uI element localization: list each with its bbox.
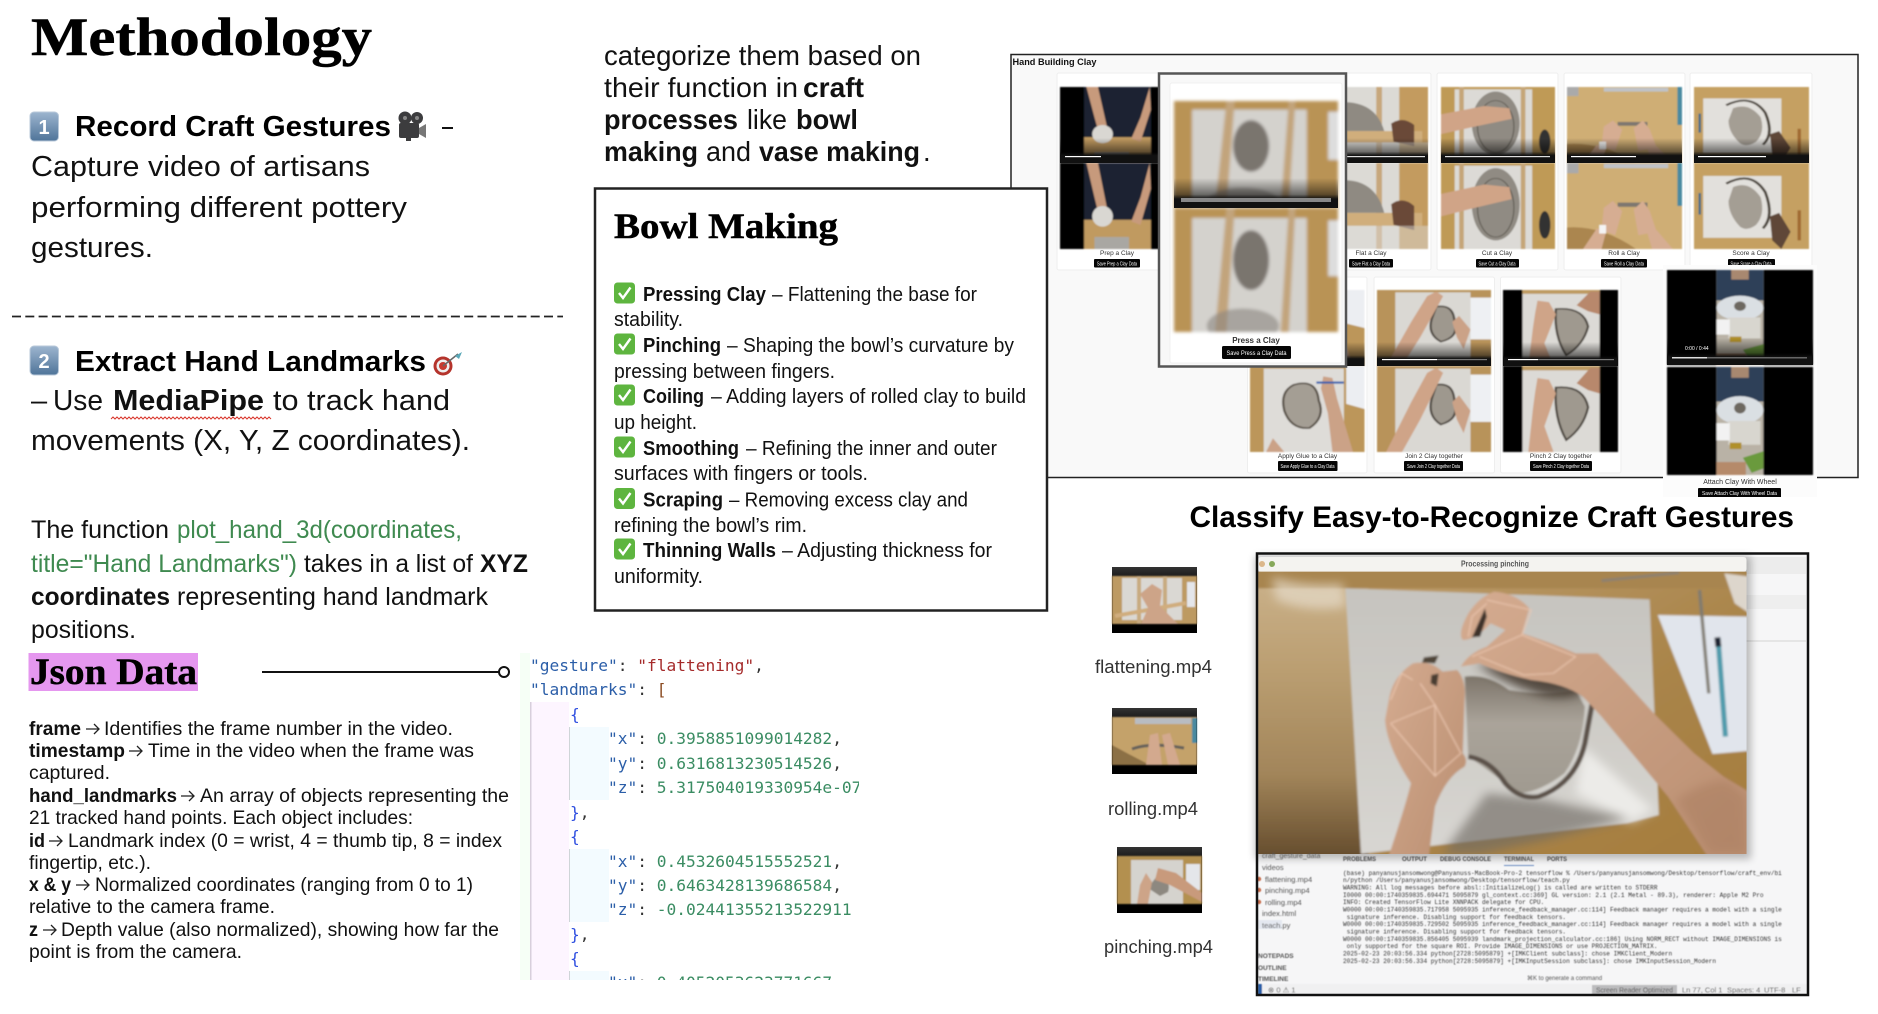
card: roll a clay: Save Roll a Clay Data [1604, 262, 1644, 268]
text: function description: takes in a list of [304, 550, 473, 578]
text: field definitions: Normalized coordinates (ranging from 0 to 1) [95, 874, 473, 896]
terminal log: INFO: Created TensorFlow Lite XNNPACK delegate for CPU. [1343, 899, 1544, 906]
explorer sidebar: pinching.mp4 [1265, 886, 1310, 895]
code panel: json sample: : 0.6316813230514526, [637, 754, 842, 773]
video file: rolling: rolling.mp4 [1108, 799, 1198, 819]
item: coiling: – Adding layers of rolled clay to build [711, 386, 1026, 408]
card: apply glue to a clay: Save Apply Glue to a Clay Data [1280, 464, 1335, 470]
item: smoothing: Smoothing [643, 438, 739, 460]
text: categorize paragraph: . [923, 136, 931, 167]
step 2: extract hand landmarks [30, 346, 528, 644]
item: thinning walls: Thinning Walls [643, 540, 776, 562]
card: prep a clay [1057, 73, 1182, 270]
code panel: json sample: : -0.02441355213522911 [637, 900, 852, 919]
item: scraping: refining the bowl’s rim. [614, 515, 807, 537]
text: field definitions: x & y [29, 874, 71, 896]
card: join 2 clay together: Save Join 2 Clay together Data [1407, 464, 1460, 470]
text: capture description: Capture video of artisans [31, 151, 370, 183]
text: categorize paragraph: making [604, 136, 698, 167]
dash [442, 127, 453, 129]
text: categorize paragraph: like [747, 104, 787, 135]
connector line to code [262, 667, 509, 677]
item: pressing clay: Pressing Clay [643, 284, 767, 306]
card: prep a clay: Prep a Clay [1100, 250, 1135, 257]
card: apply glue to a clay: Apply Glue to a Clay [1278, 453, 1338, 460]
window shadow [1255, 556, 1751, 859]
text: function description: coordinates [31, 583, 170, 611]
text: field definitions: captured. [29, 762, 110, 784]
terminal log: W0000 00:00:1740359835.856405 5095939 landmark_projection_calculator.cc:186] Using NORM_RECT without IMAGE_DIMENSIONS is [1343, 936, 1782, 943]
explorer sidebar: teach.py [1262, 921, 1291, 930]
item: smoothing: surfaces with fingers or tools. [614, 463, 868, 485]
text: function description: representing hand landmark [177, 583, 488, 611]
heading: extract hand landmarks: Extract Hand Landmarks [75, 346, 426, 378]
icon: keycap 1: 1 [38, 117, 50, 139]
terminal log: W0000 00:00:1740359835.729502 5095935 inference_feedback_manager.cc:114] Feedback manager requires a model with a single [1343, 921, 1782, 928]
icon: keycap 2 [30, 346, 58, 375]
item: scraping: – Removing excess clay and [729, 490, 968, 512]
text: field definitions: hand_landmarks [29, 785, 177, 807]
icon: keycap 2: 2 [38, 351, 50, 373]
ide backdrop on right [1746, 557, 1806, 642]
window title bar: Processing pinching [1461, 558, 1529, 568]
text: categorize paragraph: their function in [604, 72, 798, 103]
card: flat a clay [1290, 73, 1431, 270]
terminal tabs: TERMINAL [1504, 856, 1534, 863]
text: use mediapipe: movements (X, Y, Z coordinates). [31, 425, 470, 457]
item: pinching [614, 334, 1014, 383]
icon: keycap 1 [30, 112, 58, 141]
code panel: json sample: } [570, 803, 580, 822]
item: thinning walls [614, 538, 992, 588]
frame [1011, 54, 1858, 478]
text: use mediapipe: MediaPipe [113, 385, 264, 417]
text: categorize paragraph: categorize them based on [604, 40, 921, 71]
explorer sidebar: flattening.mp4 [1265, 875, 1312, 884]
terminal tabs: OUTPUT [1402, 856, 1427, 863]
item: smoothing [614, 436, 997, 485]
status bar: LF [1792, 986, 1801, 994]
card: apply glue to a clay [1248, 277, 1367, 473]
code panel: json sample: "z" [608, 900, 637, 919]
video frame: hands pinching clay with landmarks [1258, 572, 1747, 854]
card: cut a clay: Save Cut a Clay Data [1478, 262, 1516, 268]
text: categorize paragraph [604, 40, 931, 167]
terminal log: 2025-02-23 20:03:56.334 python[2728:5095879] +[IMKInputSession subclass]: chose IMKInputSession_Modern [1343, 958, 1716, 965]
text: function description: The function [31, 516, 169, 544]
item: coiling: up height. [614, 412, 697, 434]
code panel: json sample: { [570, 705, 580, 724]
item: smoothing: – Refining the inner and outer [746, 438, 997, 460]
item: coiling: Coiling [643, 386, 704, 408]
code panel: json sample: "x" [608, 852, 637, 871]
text: field definitions: id [29, 830, 45, 852]
icon: movie camera [398, 112, 426, 141]
text: field definitions: z [29, 919, 38, 941]
card: flat a clay: Flat a Clay [1355, 250, 1387, 257]
card: attach clay with wheel [1663, 265, 1817, 498]
card: prep a clay: Save Prep a Clay Data [1097, 262, 1137, 268]
text: categorize paragraph: and [706, 136, 751, 167]
text: categorize paragraph: bowl [796, 104, 858, 135]
item: coiling [614, 384, 1026, 434]
video file: flattening [1095, 567, 1212, 677]
card: pinch 2 clay together [1500, 277, 1621, 473]
item: pressing clay: stability. [614, 309, 683, 331]
text: use mediapipe: – [31, 385, 48, 417]
text: field definitions: Time in the video when the frame was [148, 740, 474, 762]
text: field definitions: point is from the camera. [29, 941, 242, 963]
text: capture description [31, 151, 408, 264]
text: field definitions: 21 tracked hand points. Each object includes: [29, 807, 413, 829]
terminal log: signature inference. Disabling support for feedback tensors. [1343, 928, 1566, 936]
card: join 2 clay together [1374, 277, 1494, 473]
card: pinch 2 clay together: Pinch 2 Clay together [1530, 453, 1593, 460]
terminal log: signature inference. Disabling support for feedback tensors. [1343, 914, 1566, 921]
code panel: json sample: : 0.6463428139686584, [637, 876, 842, 895]
status bar: Screen Reader Optimized [1596, 986, 1673, 994]
status bar: ⊗ 0 ⚠ 1 [1268, 986, 1296, 994]
terminal log: (base) panyanusjansomwong@Panyanuss-MacBook-Pro-2 tensorflow % /Users/panyanusjansomwong/Desktop/tensorflow/craft_env/bi [1343, 870, 1782, 877]
explorer sidebar: craft_gesture_data [1262, 853, 1320, 860]
card: join 2 clay together: Join 2 Clay together [1405, 453, 1464, 460]
card: pinch 2 clay together: Save Pinch 2 Clay together Data [1533, 464, 1589, 470]
heading: record craft gestures: Record Craft Gestures [75, 111, 391, 143]
terminal tabs: PORTS [1547, 856, 1568, 863]
item: pressing clay [614, 282, 977, 331]
panel: hand building clay screenshot [1011, 54, 1858, 498]
video file: pinching: pinching.mp4 [1104, 937, 1213, 957]
text: use mediapipe: Use [53, 385, 103, 417]
panel: processing pinching screenshot [1243, 554, 1808, 995]
card: cut a clay: Cut a Clay [1482, 250, 1513, 257]
code panel: json sample: : 5.317504019330954e-07 [637, 778, 861, 797]
code panel: json sample: "z" [608, 778, 637, 797]
code panel: json sample [520, 653, 861, 992]
text: field definitions: frame [29, 718, 81, 740]
card: score a clay: Score a Clay [1732, 250, 1770, 257]
heading: json data with highlight: Json Data [30, 652, 197, 693]
label: hand building clay: Hand Building Clay [1012, 57, 1097, 68]
card: score a clay [1690, 73, 1812, 270]
explorer sidebar: OUTLINE [1258, 965, 1287, 972]
code panel: json sample: : 0.4052053623771667, [637, 973, 842, 992]
explorer sidebar: rolling.mp4 [1265, 898, 1302, 907]
text: categorize paragraph: processes [604, 104, 738, 135]
card: flat a clay: Save Flat a Clay Data [1352, 262, 1390, 268]
code panel: json sample: : [ [637, 680, 666, 699]
terminal log: only supported for the square ROI. Provide IMAGE_DIMENSIONS or use PROJECTION_MATRIX. [1343, 943, 1658, 950]
heading: classify gestures: Classify Easy-to-Recognize Craft Gestures [1190, 501, 1794, 534]
code panel: json sample: { [570, 949, 580, 968]
card: attach clay with wheel: 0:00 / 0:44 [1685, 346, 1709, 352]
heading: bowl making: Bowl Making [614, 206, 838, 246]
terminal log: I0000 00:00:1740359835.694471 5095879 gl_context.cc:369] GL version: 2.1 (2.1 Metal - 89.3), renderer: Apple M2 Pro [1343, 892, 1764, 899]
code panel: json sample: , [580, 925, 590, 944]
terminal tabs: DEBUG CONSOLE [1440, 856, 1492, 863]
screenshot border [1257, 554, 1808, 995]
explorer sidebar: TIMELINE [1258, 976, 1289, 983]
item: thinning walls: uniformity. [614, 566, 703, 588]
code panel: json sample: , [580, 803, 590, 822]
title: Methodology: Methodology [31, 7, 372, 67]
terminal log [1343, 870, 1782, 982]
code panel: json sample: "landmarks" [530, 680, 637, 699]
code panel: json sample: "x" [608, 729, 637, 748]
text: field definitions: Depth value (also normalized), showing how far the [61, 919, 499, 941]
text: field definitions: relative to the camera frame. [29, 896, 275, 918]
explorer sidebar: videos [1262, 863, 1284, 872]
text: field definitions: timestamp [29, 740, 125, 762]
item: pinching: – Shaping the bowl’s curvature by [727, 335, 1014, 357]
text: categorize paragraph: craft [803, 72, 864, 103]
card: cut a clay [1437, 73, 1558, 270]
video file: pinching [1104, 847, 1213, 957]
terminal log: ⌘K to generate a command [1527, 975, 1602, 982]
terminal log: n/python /Users/panyanusjansomwong/Desktop/tensorflow/teach.py [1343, 877, 1570, 884]
text: function description: XYZ [480, 550, 528, 578]
text: categorize paragraph: vase making [759, 136, 920, 167]
explorer sidebar: NOTEPADS [1258, 953, 1294, 960]
item: pinching: pressing between fingers. [614, 361, 835, 383]
text: function description: plot_hand_3d(coordinates, [177, 516, 462, 544]
explorer sidebar [1257, 853, 1320, 983]
text: function description [31, 516, 528, 644]
code panel: json sample: "gesture" [530, 656, 618, 675]
code panel: json sample: { [570, 827, 580, 846]
window title bar [1258, 557, 1746, 572]
text: field definitions: An array of objects representing the [200, 785, 509, 807]
video file: rolling [1108, 708, 1198, 819]
card: attach clay with wheel: Save Attach Clay With Wheel Data [1702, 491, 1778, 497]
terminal log: W0000 00:00:1740359835.717958 5095935 inference_feedback_manager.cc:114] Feedback manager requires a model with a single [1343, 906, 1782, 914]
code panel: json sample: : 0.3958851099014282, [637, 729, 842, 748]
terminal tabs [1343, 856, 1568, 866]
code panel: json sample: "x" [608, 973, 637, 992]
code panel: json sample: : "flattening", [618, 656, 764, 675]
text: field definitions: fingertip, etc.). [29, 852, 151, 874]
terminal log: 2025-02-23 20:03:56.334 python[2728:5095879] +[IMKClient subclass]: chose IMKClient_Modern [1343, 950, 1672, 958]
popup card: press a clay: Save Press a Clay Data [1226, 350, 1287, 357]
item: pressing clay: – Flattening the base for [772, 284, 977, 306]
card: roll a clay: Roll a Clay [1608, 250, 1640, 257]
text: function description: positions. [31, 616, 136, 644]
explorer sidebar: index.html [1262, 909, 1297, 918]
item: scraping: Scraping [643, 490, 723, 512]
terminal log: WARNING: All log messages before absl::InitializeLog() is called are written to STDERR [1343, 884, 1658, 892]
step 1: record craft gestures [30, 111, 453, 264]
text: capture description: gestures. [31, 232, 153, 264]
code panel: json sample: "y" [608, 754, 637, 773]
item: pinching: Pinching [643, 335, 721, 357]
text: field definitions: Identifies the frame number in the video. [104, 718, 453, 740]
panel: bowl making [595, 188, 1047, 610]
item: thinning walls: – Adjusting thickness for [782, 540, 992, 562]
card: attach clay with wheel: Attach Clay With Wheel [1703, 479, 1777, 486]
icon: target with dart [434, 352, 462, 376]
popup card: press a clay [1159, 74, 1346, 366]
status bar: Ln 77, Col 1 [1682, 986, 1722, 994]
text: use mediapipe: to track hand [273, 385, 450, 417]
text: field definitions [29, 718, 509, 963]
status bar [1258, 984, 1808, 995]
status bar: Spaces: 4 [1727, 986, 1760, 994]
item: scraping [614, 488, 968, 537]
video file: flattening: flattening.mp4 [1095, 657, 1212, 677]
card: score a clay: Save Score a Clay Data [1730, 262, 1772, 268]
status bar: UTF-8 [1764, 986, 1785, 994]
text: use mediapipe [31, 385, 470, 457]
card: roll a clay [1564, 73, 1685, 270]
popup card: press a clay: Press a Clay [1232, 336, 1280, 345]
text: function description: title="Hand Landmarks") [31, 550, 297, 578]
text: capture description: performing different pottery [31, 192, 408, 224]
text: field definitions: Landmark index (0 = wrist, 4 = thumb tip, 8 = index [68, 830, 502, 852]
code panel: json sample: } [570, 925, 580, 944]
code panel: json sample: "y" [608, 876, 637, 895]
terminal tabs: PROBLEMS [1343, 856, 1377, 863]
code panel: json sample: : 0.4532604515552521, [637, 852, 842, 871]
